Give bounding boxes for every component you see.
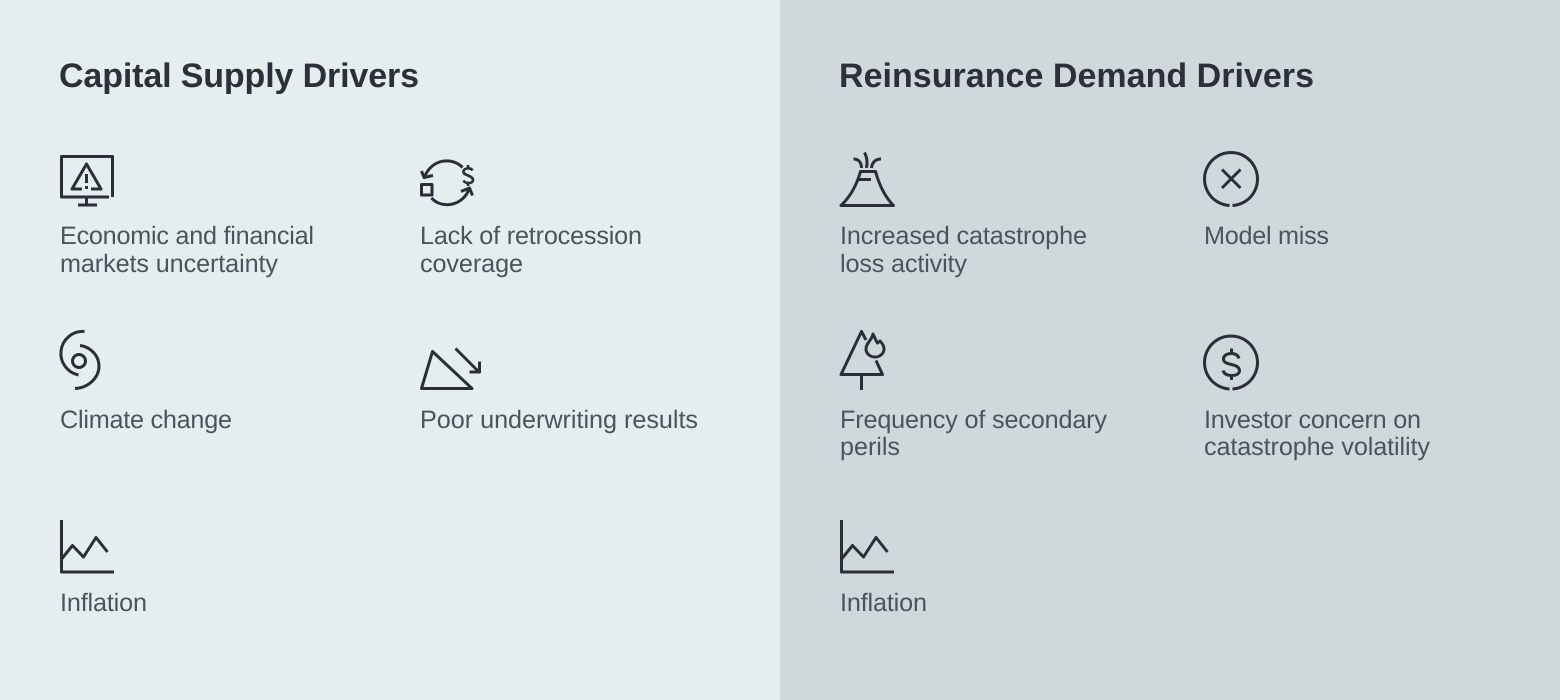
- item: increased catastrophe loss activity: [840, 152, 1087, 278]
- label: loss activity: [840, 250, 967, 278]
- heading: capital supply drivers: Capital Supply Drivers: [59, 57, 419, 95]
- label: Inflation: [60, 589, 147, 617]
- label: [60, 222, 314, 278]
- icon: retrocession cycle: [422, 161, 473, 205]
- item: inflation: [840, 520, 927, 617]
- icon: volcano: [841, 152, 894, 206]
- label: Investor concern on: [1204, 406, 1421, 434]
- icon: circled dollar: [1204, 336, 1258, 389]
- item: frequency of secondary perils: [840, 332, 1107, 461]
- heading: reinsurance demand drivers: Reinsurance Demand Drivers: [839, 57, 1314, 95]
- label: coverage: [420, 250, 523, 278]
- item: investor concern on catastrophe volatility: [1204, 336, 1430, 461]
- panel: capital supply drivers: [0, 0, 780, 700]
- label: Climate change: [60, 406, 232, 434]
- label: Model miss: [1204, 222, 1329, 250]
- icon: monitor with warning: [62, 156, 112, 205]
- icon: line chart: [842, 520, 894, 572]
- item: climate change: [60, 331, 232, 434]
- icon: cyclone: [61, 331, 99, 388]
- label: Economic and financial: [60, 222, 314, 250]
- label: perils: [840, 433, 900, 461]
- item: lack of retrocession coverage: [420, 161, 642, 278]
- label: [840, 406, 1107, 461]
- item: model miss: [1204, 153, 1329, 250]
- item: poor underwriting results: [420, 348, 698, 434]
- label: catastrophe volatility: [1204, 433, 1430, 461]
- label: markets uncertainty: [60, 250, 278, 278]
- label: [840, 222, 1087, 278]
- icon: tree with flame: [841, 332, 884, 390]
- icon: falling slope with arrow: [422, 348, 480, 388]
- panel: reinsurance demand drivers: [780, 0, 1560, 700]
- label: [1204, 406, 1430, 461]
- item: inflation: [60, 520, 147, 617]
- label: Inflation: [840, 589, 927, 617]
- label: Lack of retrocession: [420, 222, 642, 250]
- label: [420, 222, 642, 278]
- icon: line chart: [62, 520, 114, 572]
- item: economic and financial markets uncertainty: [60, 156, 314, 278]
- icon: circled x: [1204, 153, 1258, 206]
- label: Poor underwriting results: [420, 406, 698, 434]
- label: Frequency of secondary: [840, 406, 1107, 434]
- label: Increased catastrophe: [840, 222, 1087, 250]
